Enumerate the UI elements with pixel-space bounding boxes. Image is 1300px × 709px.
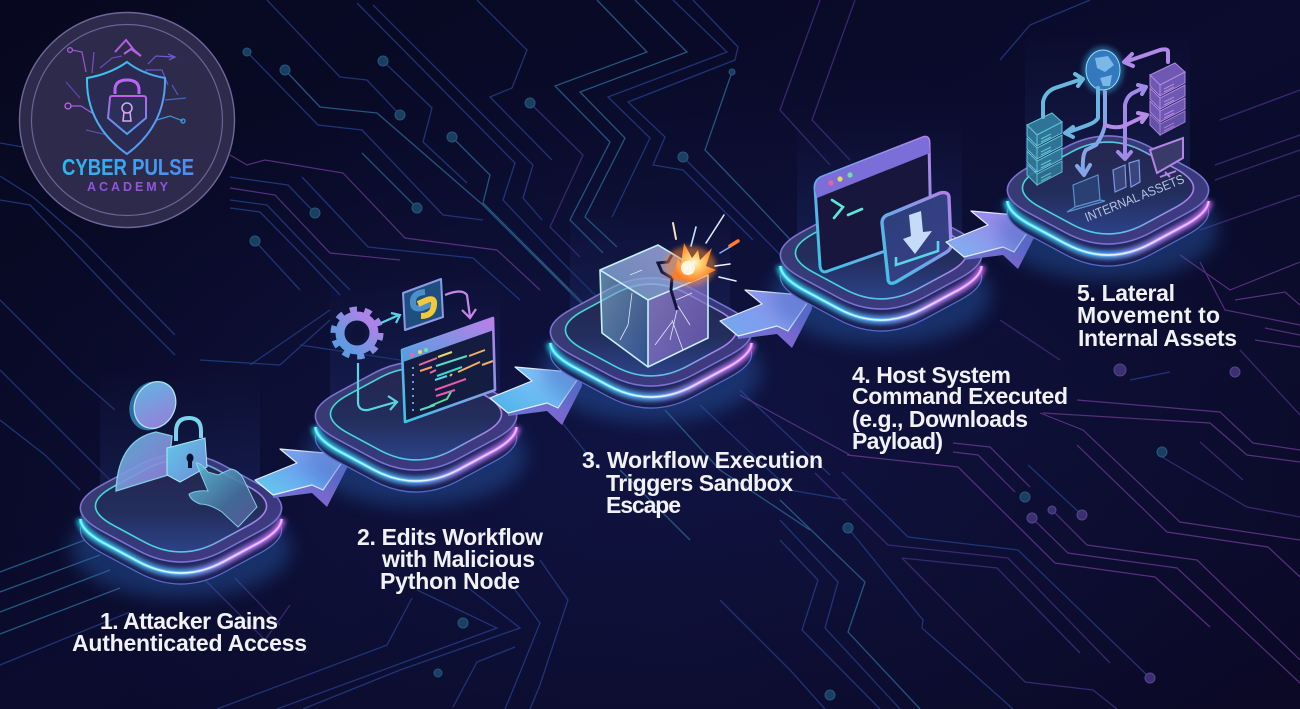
label: step 1: Authenticated Access bbox=[72, 630, 307, 656]
label: step 4: Payload) bbox=[852, 428, 943, 454]
label: step 5: Internal Assets bbox=[1078, 325, 1237, 351]
icon: right server stack bbox=[1150, 63, 1185, 135]
arrow: step 1 to 2 bbox=[255, 449, 347, 507]
label: step 3: 3. Workflow Execution bbox=[582, 447, 823, 473]
icon: hand pointing at lock bbox=[189, 463, 257, 527]
icon: globe bbox=[1082, 46, 1124, 94]
step 4 platform: host command executed bbox=[771, 137, 991, 345]
label: step 1: 1. Attacker Gains bbox=[100, 608, 278, 634]
icon: laptop bbox=[1067, 175, 1105, 212]
label: step 4: Command Executed bbox=[852, 383, 1068, 409]
icon: padlock bbox=[167, 418, 207, 482]
label: step 3: Triggers Sandbox bbox=[606, 470, 793, 496]
icon: code window bbox=[402, 318, 495, 422]
label: step 3 bbox=[582, 447, 823, 518]
arrow: step 3 to 4 bbox=[720, 290, 812, 348]
step 2 platform: edits workflow bbox=[306, 279, 526, 506]
icon: cracked cube bbox=[600, 245, 708, 367]
arrow: step 4 to 5 bbox=[946, 211, 1038, 269]
step 1 platform: attacker gains access bbox=[71, 374, 291, 598]
icon: user silhouette bbox=[116, 374, 183, 491]
label: step 4 bbox=[852, 362, 1068, 454]
arrow: python to code window bbox=[445, 292, 476, 318]
terminal prompt bbox=[832, 200, 862, 218]
icon: sparks bbox=[673, 215, 738, 281]
step 3 platform: sandbox escape bbox=[541, 215, 761, 422]
label: step 2: Python Node bbox=[380, 568, 520, 594]
network arrows bbox=[1043, 49, 1168, 175]
icon: terminal window bbox=[815, 137, 931, 272]
icon: logo padlock bbox=[108, 80, 146, 134]
step 5 platform: lateral movement bbox=[998, 46, 1218, 280]
logo subtitle: ACADEMY bbox=[87, 180, 169, 194]
icon: logo shield bbox=[87, 62, 165, 154]
arrow: step 2 to 3 bbox=[490, 367, 582, 425]
internal assets label: INTERNAL ASSETS bbox=[1083, 171, 1187, 225]
label: step 5 bbox=[1077, 280, 1237, 351]
icon: gear bbox=[334, 310, 380, 356]
label: step 5: Movement to bbox=[1077, 302, 1220, 328]
logo badge: Cyber Pulse Academy bbox=[20, 12, 234, 228]
arrow: gear to python bbox=[381, 313, 400, 323]
icon: monitor bbox=[1150, 138, 1183, 177]
icon: phones bbox=[1113, 160, 1140, 192]
icon: left server stack bbox=[1027, 113, 1062, 185]
icon: logo circuit traces bbox=[65, 40, 186, 136]
arrow: gear to code window bbox=[358, 363, 397, 410]
icon: download tile bbox=[882, 193, 951, 283]
label: step 4: 4. Host System bbox=[852, 362, 1011, 388]
hologram columns behind steps bbox=[100, 30, 1190, 510]
label: step 5: 5. Lateral bbox=[1077, 280, 1175, 306]
logo wordmark: CYBER PULSE bbox=[62, 154, 194, 180]
label: step 2: 2. Edits Workflow bbox=[357, 524, 543, 550]
label: step 2 bbox=[357, 524, 543, 594]
label: step 3: Escape bbox=[606, 492, 681, 518]
icon: python tile bbox=[403, 279, 443, 330]
label: step 1 bbox=[72, 608, 307, 656]
icon: explosion burst bbox=[664, 243, 716, 286]
label: step 2: with Malicious bbox=[381, 546, 535, 572]
label: step 4: (e.g., Downloads bbox=[852, 406, 1028, 432]
